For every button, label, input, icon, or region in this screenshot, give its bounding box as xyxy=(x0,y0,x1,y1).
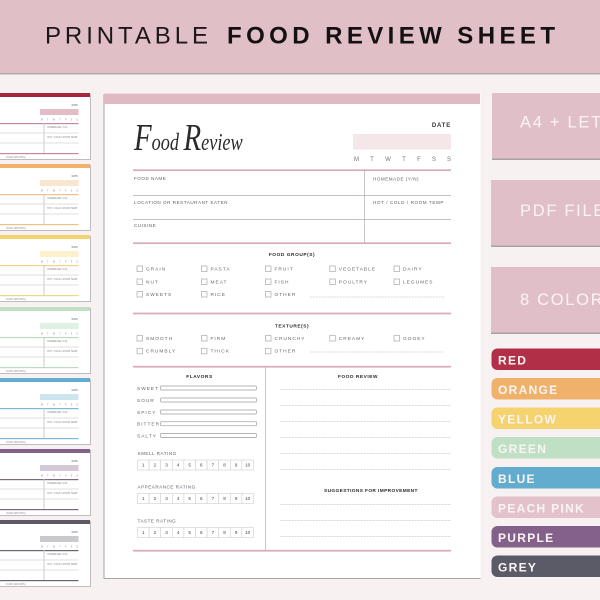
title: FOOD REVIEW SHEET xyxy=(227,22,555,50)
appearance rating: 7 xyxy=(212,496,215,501)
thumbnail: grey: DATE xyxy=(72,531,78,534)
food groups section: PASTA xyxy=(210,266,231,272)
smell rating: 9 xyxy=(235,463,238,468)
taste rating: 2 xyxy=(154,530,157,535)
thumbnail: green: M T W T F S S xyxy=(41,332,78,336)
thumbnail: purple: HOT / COLD / ROOM TEMP xyxy=(47,492,78,495)
thumbnail: grey: HOT / COLD / ROOM TEMP xyxy=(47,563,78,566)
thumbnail: orange: FOOD GROUP(S) xyxy=(6,227,26,230)
food groups section: FISH xyxy=(274,279,289,285)
date field: M xyxy=(354,157,359,163)
thumbnail: purple xyxy=(0,449,91,516)
flavors panel xyxy=(137,374,256,440)
textures section xyxy=(133,323,451,368)
textures section: OTHER xyxy=(274,349,296,355)
info table: HOT / COLD / ROOM TEMP xyxy=(373,200,444,205)
food groups section: RICE xyxy=(210,292,226,298)
thumbnail: green: FOOD GROUP(S) xyxy=(6,370,26,373)
smell rating: 7 xyxy=(212,463,215,468)
color pill: red xyxy=(492,348,600,370)
color pill: peach pink xyxy=(492,496,600,518)
appearance rating: 5 xyxy=(188,496,191,501)
food groups section: POULTRY xyxy=(339,279,368,285)
appearance rating: 10 xyxy=(245,496,251,501)
thumbnail: grey: M T W T F S S xyxy=(41,546,78,548)
food groups section xyxy=(133,252,451,314)
column divider and closing rule xyxy=(133,367,451,552)
title: PRINTABLE xyxy=(45,22,208,50)
smell rating: 5 xyxy=(188,463,191,468)
flavors panel: SPICY xyxy=(137,410,156,416)
smell rating xyxy=(138,451,254,470)
thumbnail: red: HOT / COLD / ROOM TEMP xyxy=(47,136,78,139)
color pill: yellow xyxy=(492,408,600,429)
color pill: peach pink: PEACH PINK xyxy=(498,502,585,516)
textures section: CREAMY xyxy=(339,336,365,342)
color pill: grey xyxy=(492,556,600,577)
thumbnail: orange: HOMEMADE (Y/N) xyxy=(47,197,68,200)
appearance rating: 6 xyxy=(200,496,203,501)
taste rating xyxy=(138,518,254,538)
thumbnail: red: HOMEMADE (Y/N) xyxy=(47,126,68,129)
thumbnail: blue: HOMEMADE (Y/N) xyxy=(47,411,68,414)
textures section: CRUMBLY xyxy=(146,349,176,355)
textures section: SMOOTH xyxy=(146,336,173,342)
thumbnail: red xyxy=(0,93,91,160)
flavors panel: SALTY xyxy=(137,434,157,440)
textures section: GOOEY xyxy=(403,336,426,342)
smell rating: 4 xyxy=(177,463,180,468)
taste rating: 5 xyxy=(188,530,191,535)
info table: LOCATION OR RESTAURANT EATEN xyxy=(134,200,228,205)
color pill: orange: ORANGE xyxy=(498,383,558,397)
thumbnail: orange: HOT / COLD / ROOM TEMP xyxy=(47,207,78,210)
thumbnail: blue: HOT / COLD / ROOM TEMP xyxy=(47,421,78,424)
food groups section: OTHER xyxy=(274,292,296,298)
food groups section: GRAIN xyxy=(146,266,166,272)
taste rating: 10 xyxy=(245,530,251,535)
smell rating: 6 xyxy=(200,463,203,468)
thumbnail: purple: DATE xyxy=(72,460,78,463)
date field xyxy=(353,123,451,163)
thumbnail: orange: M T W T F S S xyxy=(41,190,78,192)
thumbnail: purple: HOMEMADE (Y/N) xyxy=(47,482,68,485)
thumbnail: yellow: HOT / COLD / ROOM TEMP xyxy=(47,278,78,281)
taste rating: TASTE RATING xyxy=(138,518,176,524)
thumbnail: blue: FOOD GROUP(S) xyxy=(6,441,26,444)
thumbnail: yellow: DATE xyxy=(72,246,78,249)
appearance rating: 2 xyxy=(154,496,157,501)
thumbnail: red: DATE xyxy=(72,104,78,107)
taste rating: 4 xyxy=(177,530,180,535)
smell rating: 2 xyxy=(154,463,157,468)
thumbnail: yellow xyxy=(0,235,91,302)
thumbnail: purple: FOOD GROUP(S) xyxy=(6,512,26,515)
thumbnail: blue: DATE xyxy=(72,389,78,392)
food groups section: MEAT xyxy=(210,279,227,285)
smell rating: 10 xyxy=(245,463,251,468)
smell rating: SMELL RATING xyxy=(138,451,177,456)
thumbnail: grey: FOOD GROUP(S) xyxy=(6,583,26,586)
thumbnail: yellow: FOOD GROUP(S) xyxy=(6,298,26,301)
food groups section: SWEETS xyxy=(146,292,172,298)
appearance rating xyxy=(138,484,254,504)
thumbnail: green xyxy=(0,307,91,374)
appearance rating: 8 xyxy=(223,496,226,501)
flavors panel: SWEET xyxy=(137,386,159,392)
thumbnail: green: HOMEMADE (Y/N) xyxy=(47,340,68,343)
date field: T xyxy=(402,157,406,163)
panel: A4 + Letter xyxy=(492,93,600,160)
panel: PDF file xyxy=(491,180,600,247)
food review lines: FOOD REVIEW xyxy=(338,374,378,380)
info table xyxy=(133,169,451,244)
info table: HOMEMADE (Y/N) xyxy=(373,176,419,182)
appearance rating: 1 xyxy=(142,496,145,501)
suggestions lines: SUGGESTIONS FOR IMPROVEMENT xyxy=(324,488,418,494)
flavors panel: FLAVORS xyxy=(186,374,213,380)
info table: CUISINE xyxy=(134,223,156,228)
date field: T xyxy=(370,157,374,163)
food groups section: VEGETABLE xyxy=(339,266,376,272)
date field: S xyxy=(447,157,451,163)
thumbnail: yellow: M T W T F S S xyxy=(41,260,78,264)
main review sheet xyxy=(104,93,480,579)
date field: W xyxy=(385,157,391,163)
textures section: TEXTURE(S) xyxy=(275,323,309,329)
taste rating: 7 xyxy=(212,530,215,535)
sheet heading: Food Review xyxy=(133,117,243,159)
taste rating: 8 xyxy=(223,530,226,535)
thumbnail: blue: M T W T F S S xyxy=(41,404,78,406)
thumbnail: red: FOOD GROUP(S) xyxy=(6,156,26,159)
color pill: blue xyxy=(492,467,600,488)
thumbnail: green: HOT / COLD / ROOM TEMP xyxy=(47,350,78,353)
flavors panel: BITTER xyxy=(137,422,160,428)
appearance rating: APPEARANCE RATING xyxy=(138,484,196,490)
thumbnail: grey: HOMEMADE (Y/N) xyxy=(47,553,68,556)
color pill: purple: PURPLE xyxy=(498,531,554,545)
taste rating: 9 xyxy=(235,530,238,535)
color pill: orange xyxy=(492,378,600,400)
panel: 8 colors xyxy=(491,267,600,334)
date field: DATE xyxy=(432,123,451,129)
color pill: blue: BLUE xyxy=(498,472,536,486)
appearance rating: 3 xyxy=(165,496,168,501)
thumbnail: orange: DATE xyxy=(72,175,78,178)
color pill: grey: GREY xyxy=(498,560,537,574)
thumbnail: red: M T W T F S S xyxy=(41,118,78,122)
color pill: red: RED xyxy=(498,353,527,367)
header banner xyxy=(0,0,600,74)
taste rating: 6 xyxy=(200,530,203,535)
appearance rating: 9 xyxy=(235,496,238,501)
appearance rating: 4 xyxy=(177,496,180,501)
smell rating: 1 xyxy=(142,463,145,468)
food groups section: LEGUMES xyxy=(403,279,433,285)
food groups section: FRUIT xyxy=(274,266,294,272)
thumbnail: yellow: HOMEMADE (Y/N) xyxy=(47,268,68,271)
info table: FOOD NAME xyxy=(134,176,166,181)
smell rating: 3 xyxy=(165,463,168,468)
color pill: green: GREEN xyxy=(498,442,547,456)
textures section: FIRM xyxy=(210,336,226,342)
taste rating: 1 xyxy=(142,530,145,535)
food groups section: FOOD GROUP(S) xyxy=(269,252,315,258)
textures section: CRUNCHY xyxy=(274,336,306,342)
textures section: THICK xyxy=(210,349,230,355)
thumbnail: grey xyxy=(0,520,91,587)
date field: S xyxy=(432,157,436,163)
date field: F xyxy=(417,157,421,163)
flavors panel: SOUR xyxy=(137,398,155,404)
color pill: yellow: YELLOW xyxy=(498,412,557,426)
smell rating: 8 xyxy=(223,463,226,468)
color pill: green xyxy=(492,437,600,458)
thumbnail: green: DATE xyxy=(72,318,78,321)
food groups section: NUT xyxy=(146,279,159,285)
thumbnail: orange xyxy=(0,164,91,231)
color pill: purple xyxy=(492,526,600,548)
thumbnail: purple: M T W T F S S xyxy=(41,474,78,478)
food groups section: DAIRY xyxy=(403,266,423,272)
taste rating: 3 xyxy=(165,530,168,535)
thumbnail: blue xyxy=(0,378,91,445)
